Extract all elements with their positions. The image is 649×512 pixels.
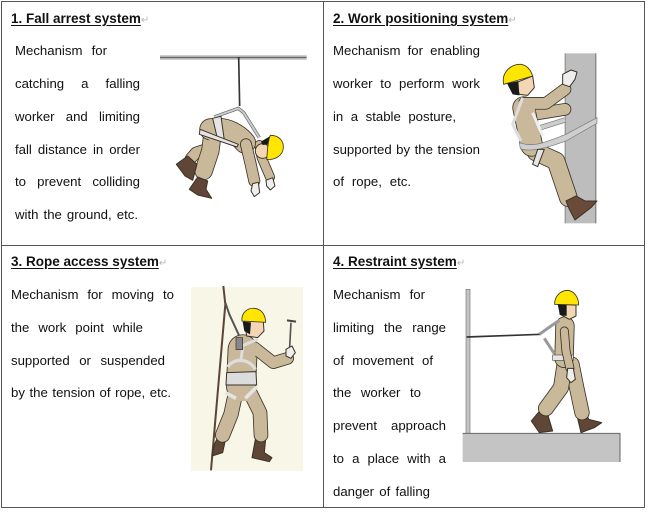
text block: work positioning description: in a stable posture, bbox=[333, 109, 456, 124]
heading: work positioning: 2. Work positioning system bbox=[333, 11, 508, 26]
text block: restraint description: Mechanism for bbox=[333, 287, 425, 302]
text block: rope access description: the work point while bbox=[11, 320, 143, 335]
text block: fall arrest description: catching a falling bbox=[15, 76, 140, 91]
text block: work positioning description: Mechanism for enabling bbox=[333, 43, 480, 58]
heading: fall arrest: ↵ bbox=[141, 15, 149, 26]
heading: rope access: ↵ bbox=[159, 258, 167, 269]
text block: fall arrest description bbox=[15, 43, 140, 222]
heading: rope access: 3. Rope access system bbox=[11, 254, 159, 269]
text block: restraint description: prevent approach bbox=[333, 418, 446, 433]
text block: restraint description: the worker to bbox=[333, 385, 421, 400]
icon: worker on rope with hammer bbox=[191, 286, 303, 471]
text block: restraint description: limiting the range bbox=[333, 320, 446, 335]
text block: restraint description: to a place with a bbox=[333, 451, 446, 466]
text block: work positioning description bbox=[333, 43, 480, 189]
text block: fall arrest description: worker and limiting bbox=[15, 109, 140, 124]
text block: rope access description: Mechanism for moving to bbox=[11, 287, 174, 302]
text block: work positioning description: of rope, etc. bbox=[333, 174, 411, 189]
text block: work positioning description: worker to perform work bbox=[333, 76, 480, 91]
icon: worker on pole bbox=[502, 53, 598, 224]
icon: worker hanging from rail bbox=[160, 55, 307, 199]
heading: work positioning: ↵ bbox=[508, 15, 517, 26]
text block: rope access description bbox=[11, 287, 174, 400]
text block: rope access description: supported or suspended bbox=[11, 353, 165, 368]
panel: fall arrest system bbox=[1, 1, 324, 246]
text block: restraint description: danger of falling bbox=[333, 484, 430, 499]
panel: work positioning system bbox=[323, 1, 645, 246]
text block: fall arrest description: with the ground, etc. bbox=[15, 207, 138, 222]
heading: fall arrest: 1. Fall arrest system bbox=[11, 11, 141, 26]
text block: rope access description: by the tension of rope, etc. bbox=[11, 385, 171, 400]
text block: fall arrest description: to prevent colliding bbox=[15, 174, 140, 189]
text block: work positioning description: supported by the tension bbox=[333, 142, 480, 157]
text block: fall arrest description: fall distance in order bbox=[15, 142, 140, 157]
text block: restraint description bbox=[333, 287, 446, 499]
panel: restraint system bbox=[323, 245, 645, 508]
heading: restraint: ↵ bbox=[457, 258, 465, 269]
heading: restraint: 4. Restraint system bbox=[333, 254, 457, 269]
text block: restraint description: of movement of bbox=[333, 353, 433, 368]
panel: rope access system bbox=[1, 245, 324, 508]
text block: fall arrest description: Mechanism for bbox=[15, 43, 107, 58]
